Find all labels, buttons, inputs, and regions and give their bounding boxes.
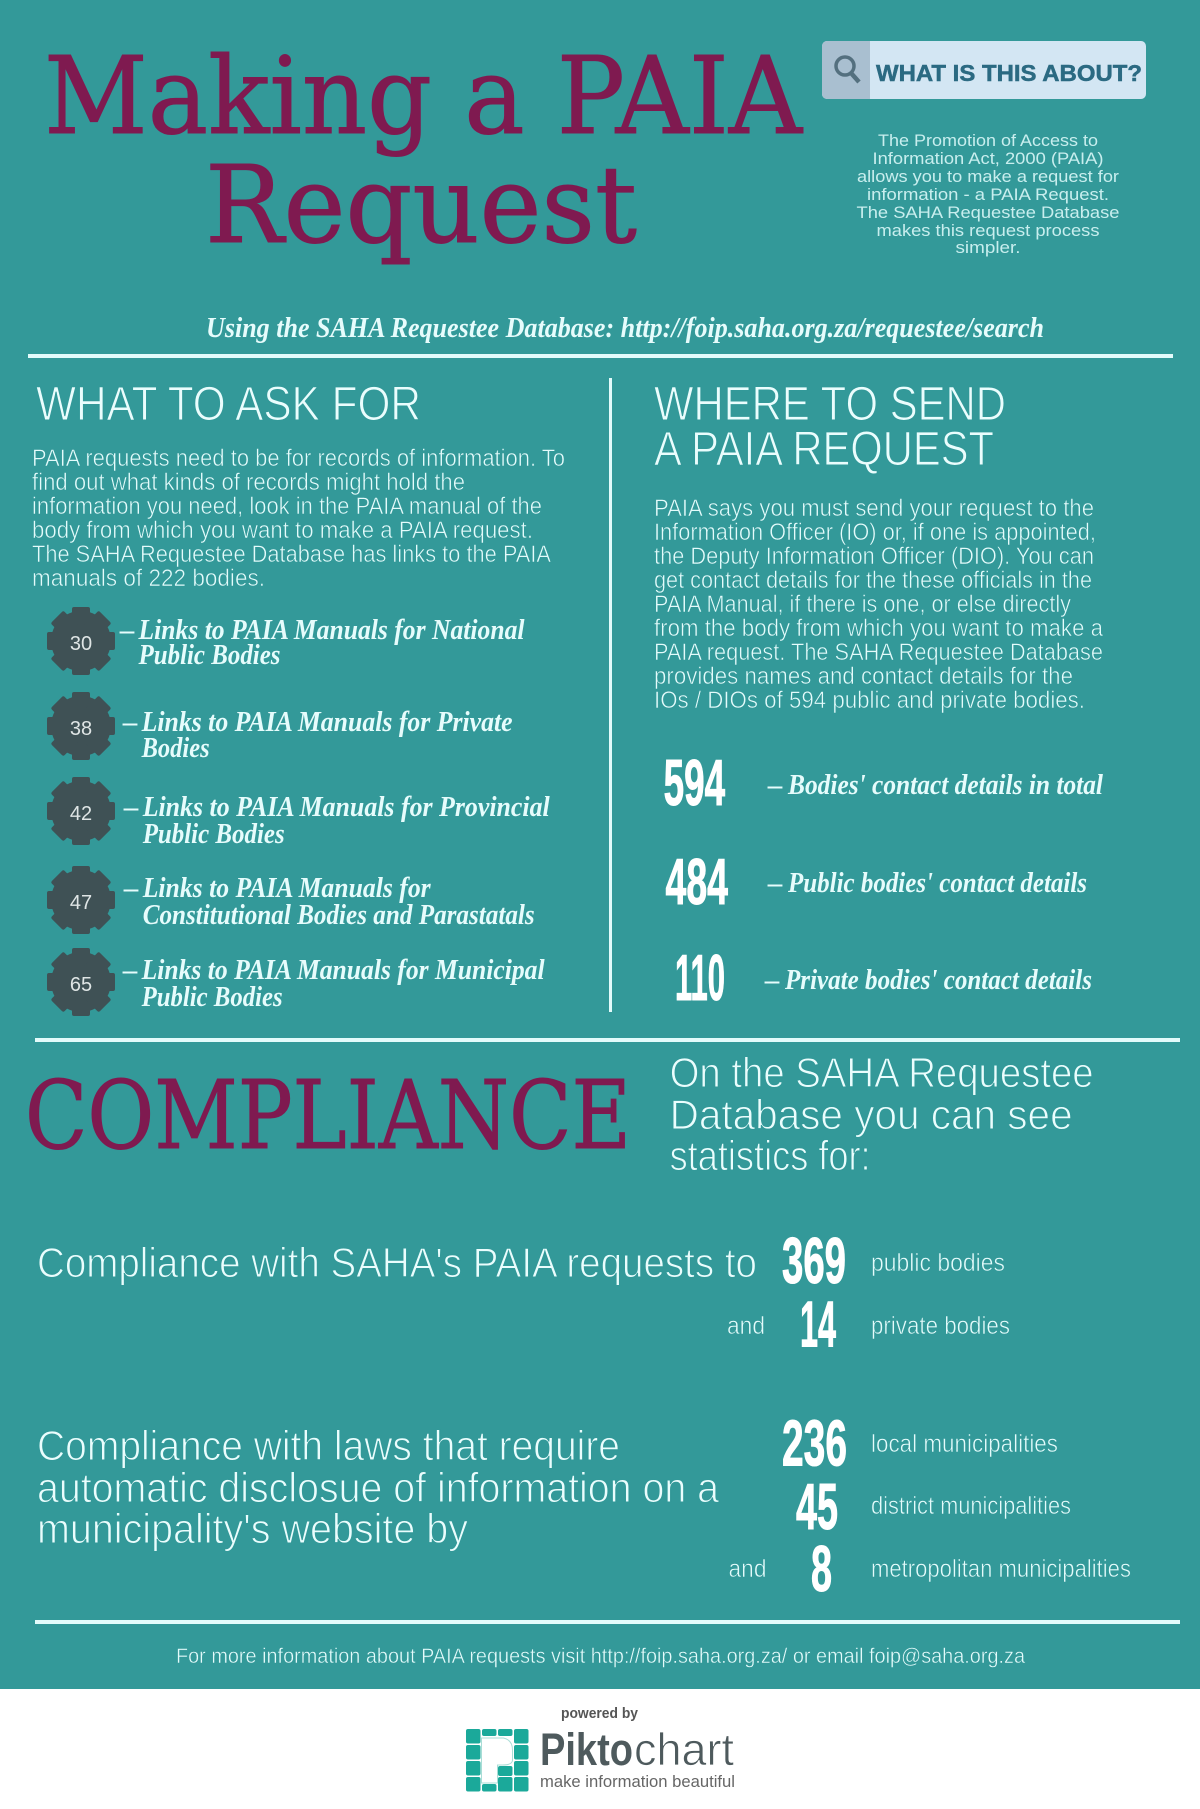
panel: where to send (654, 378, 1104, 1014)
list item: 30 national: – (119, 614, 135, 646)
list item: 38 private: Links to PAIA Manuals for Private (141, 706, 513, 738)
panel: compliance with laws (37, 1406, 1131, 1605)
stat: 110: Private bodies' contact details (784, 964, 1092, 996)
stat: 110: 110 (675, 941, 725, 1014)
list item: 30 national: 30 (70, 633, 92, 655)
text block: statistics intro: statistics for: (670, 1132, 871, 1179)
stat: 14 private bodies (727, 1288, 1010, 1360)
stat: 236 local municipalities: local municipalities (871, 1430, 1058, 1458)
stat: 8 metropolitan municipalities: and (728, 1555, 766, 1583)
panel: compliance with requests: Compliance with SAHA's PAIA requests to (37, 1239, 757, 1286)
text block: what to ask for body (32, 445, 565, 592)
text block: about PAIA: The SAHA Requestee Database (856, 203, 1120, 222)
footer: powered by Piktochart: chart (634, 1724, 734, 1775)
text block: about PAIA: The Promotion of Access to (878, 131, 1098, 150)
stat: 14 private bodies: private bodies (871, 1312, 1010, 1340)
stat: 110 (675, 941, 1092, 1014)
title (44, 35, 804, 268)
list item: 42 provincial: – (123, 791, 139, 823)
footer note: For more information about PAIA requests visit http://foip.saha.org.za/ or email foip@saha.org.za (176, 1644, 1025, 1668)
list item: 38 private: Bodies (141, 732, 210, 764)
text block: where to send body: Information Officer (IO) or, if one is appointed, (654, 519, 1096, 546)
title: Making a PAIA (44, 35, 804, 159)
stat: 484: – (767, 867, 783, 899)
list item: 42 provincial: 42 (70, 803, 92, 825)
list item: 38 private: – (122, 706, 138, 738)
text block: what to ask for body: information you need, look in the PAIA manual of the (32, 493, 542, 520)
list item: 65 municipal: 65 (70, 974, 92, 996)
footer: powered by Piktochart: Pikto (540, 1724, 633, 1775)
list item: 65 municipal (47, 948, 545, 1016)
text block: what to ask for body: The SAHA Requestee Database has links to the PAIA (32, 541, 551, 568)
list item: 47 constitutional: 47 (70, 892, 92, 914)
stat: 484 (666, 845, 1087, 918)
panel: compliance with laws: municipality's website by (37, 1505, 468, 1552)
text block: about PAIA: information - a PAIA Request. (867, 185, 1109, 204)
text block: what to ask for body: find out what kinds of records might hold the (32, 469, 465, 496)
stat: 8 metropolitan municipalities: metropolitan municipalities (871, 1555, 1131, 1583)
text block: statistics intro: Database you can see (670, 1091, 1073, 1138)
footer: powered by Piktochart: powered by (561, 1705, 639, 1722)
stat: 14 private bodies: and (727, 1312, 765, 1340)
icon: Piktochart logo (466, 1729, 528, 1792)
stat: 45 district municipalities: 45 (796, 1470, 838, 1543)
title: Request (205, 144, 637, 268)
text block: where to send body: PAIA says you must send your request to the (654, 495, 1094, 522)
text block: about PAIA: Information Act, 2000 (PAIA) (872, 149, 1104, 168)
list item: 65 municipal: Links to PAIA Manuals for Municipal (141, 954, 545, 986)
list item: 30 national (47, 607, 525, 675)
list item: 42 provincial (47, 777, 551, 850)
stat: 369 public bodies: public bodies (871, 1249, 1005, 1277)
text block: about PAIA: simpler. (956, 238, 1020, 257)
heading: where to send: WHERE TO SEND (654, 378, 1006, 431)
stat: 236 local municipalities: 236 (782, 1406, 847, 1480)
text block: where to send body: get contact details for the these officials in the (654, 567, 1092, 594)
panel: what to ask for (32, 378, 565, 1016)
text block: where to send body: provides names and contact details for the (654, 663, 1073, 690)
heading: where to send (654, 378, 1006, 476)
footer: powered by Piktochart: make information beautiful (540, 1772, 735, 1791)
text block: about PAIA (856, 131, 1120, 257)
list item: 38 private: 38 (70, 718, 92, 740)
stat: 45 district municipalities (796, 1470, 1071, 1543)
stat: 594: 594 (664, 746, 725, 819)
list item: 65 municipal: Public Bodies (141, 981, 283, 1013)
text block: what to ask for body: manuals of 222 bodies. (32, 565, 265, 592)
subtitle: database link: Using the SAHA Requestee Database: http://foip.saha.org.za/requestee/search (206, 312, 1044, 344)
stat: 369 public bodies: 369 (782, 1224, 846, 1297)
stat: 484: Public bodies' contact details (787, 867, 1087, 899)
stat: 484: 484 (666, 845, 728, 918)
text block: where to send body: from the body from which you want to make a (654, 615, 1104, 642)
stat: 8 metropolitan municipalities: 8 (811, 1532, 832, 1605)
search box: what is this about (822, 41, 1146, 99)
list item: 47 constitutional: Links to PAIA Manuals for (142, 872, 431, 904)
stat: 236 local municipalities (782, 1406, 1058, 1480)
stat: 8 metropolitan municipalities (728, 1532, 1131, 1605)
list item: 30 national: Links to PAIA Manuals for National (138, 614, 525, 646)
text block: where to send body: IOs / DIOs of 594 public and private bodies. (654, 687, 1085, 714)
text block: about PAIA: allows you to make a request for (857, 167, 1119, 186)
icon: magnifying glass (836, 57, 859, 82)
list item: 47 constitutional: Constitutional Bodies and Parastatals (143, 899, 535, 931)
list item: 30 national: Public Bodies (138, 639, 280, 671)
list item: 38 private (47, 692, 513, 764)
stat: 110: – (764, 964, 780, 996)
stat: 594: – (767, 769, 783, 801)
stat: 369 public bodies (782, 1224, 1005, 1297)
list item: 42 provincial: Links to PAIA Manuals for Provincial (142, 791, 551, 823)
text block: about PAIA: makes this request process (876, 221, 1100, 240)
panel: compliance with requests (37, 1224, 1010, 1360)
list item: 65 municipal: – (122, 954, 138, 986)
text block: what to ask for body: PAIA requests need to be for records of information. To (32, 445, 565, 472)
text block: where to send body (654, 495, 1104, 714)
text block: where to send body: PAIA request. The SAHA Requestee Database (654, 639, 1103, 666)
text block: where to send body: PAIA Manual, if there is one, or else directly (654, 591, 1071, 618)
text block: what to ask for body: body from which you want to make a PAIA request. (32, 517, 533, 544)
list item: 47 constitutional: – (123, 872, 139, 904)
stat: 594 (664, 746, 1104, 819)
text block: statistics intro (670, 1049, 1094, 1179)
heading: where to send: A PAIA REQUEST (654, 423, 994, 476)
stat: 14 private bodies: 14 (800, 1288, 836, 1360)
stat: 594: Bodies' contact details in total (787, 769, 1104, 801)
search box: what is this about: WHAT IS THIS ABOUT? (876, 60, 1142, 86)
text block: statistics intro: On the SAHA Requestee (670, 1049, 1094, 1096)
panel: compliance with laws: Compliance with laws that require (37, 1422, 620, 1469)
footer: powered by Piktochart (0, 1689, 1200, 1809)
heading: what to ask for: WHAT TO ASK FOR (36, 378, 421, 431)
list item: 47 constitutional (47, 866, 535, 934)
stat: 45 district municipalities: district municipalities (871, 1492, 1071, 1520)
panel: compliance with laws: automatic disclosue of information on a (37, 1464, 720, 1511)
text block: where to send body: the Deputy Information Officer (DIO). You can (654, 543, 1094, 570)
list item: 42 provincial: Public Bodies (142, 818, 285, 850)
heading: compliance: COMPLIANCE (25, 1061, 631, 1171)
